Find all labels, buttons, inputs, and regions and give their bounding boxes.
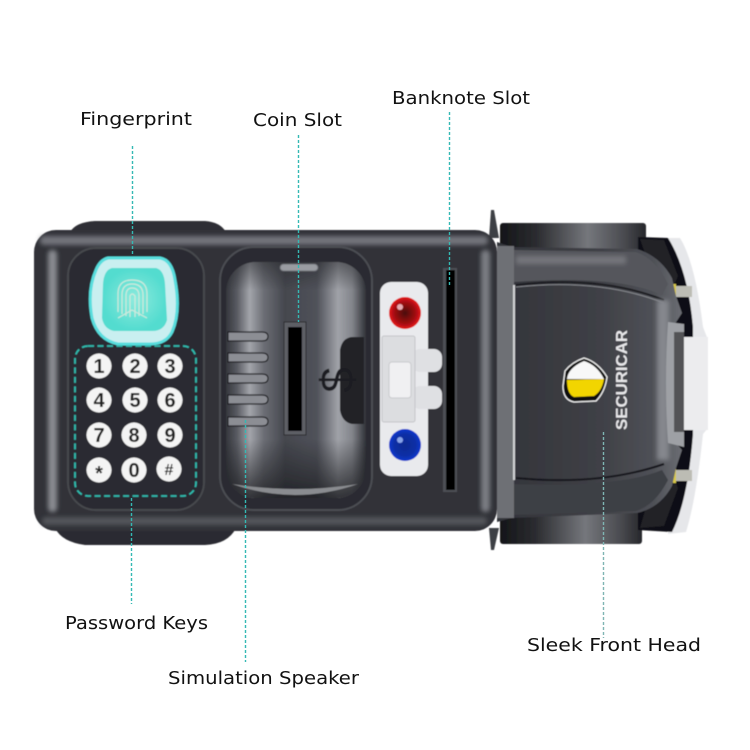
key numbers: 5 xyxy=(129,390,141,412)
grille xyxy=(666,322,684,447)
dollar emblem: $ xyxy=(311,367,363,393)
fingerprint icon xyxy=(118,280,147,318)
key numbers: * xyxy=(95,463,103,485)
key numbers: 0 xyxy=(128,460,140,482)
key numbers: 7 xyxy=(93,425,105,447)
key numbers: 1 xyxy=(93,356,105,378)
label: Coin Slot: Coin Slot xyxy=(253,110,342,131)
front wheels xyxy=(500,223,646,544)
toy car xyxy=(34,210,708,550)
rear wheels xyxy=(55,221,236,545)
mirrors xyxy=(489,210,499,550)
key discs xyxy=(86,354,182,482)
speaker dome xyxy=(220,247,372,510)
banknote slot xyxy=(443,268,457,492)
key numbers: 3 xyxy=(164,356,176,378)
shield logo xyxy=(563,358,607,402)
label: Banknote Slot: Banknote Slot xyxy=(392,88,530,109)
brand name: SECURICAR xyxy=(614,330,631,430)
label: Fingerprint: Fingerprint xyxy=(80,109,192,130)
leader lines xyxy=(132,112,604,662)
password keypad xyxy=(75,346,196,496)
key numbers: # xyxy=(165,462,174,479)
key numbers: 9 xyxy=(164,425,176,447)
key numbers: 6 xyxy=(164,390,176,412)
label: Simulation Speaker: Simulation Speaker xyxy=(168,668,360,689)
dashed keypad outline xyxy=(75,346,196,496)
label: Sleek Front Head: Sleek Front Head xyxy=(527,635,701,656)
key numbers: 2 xyxy=(129,356,141,378)
cab hood xyxy=(497,242,684,522)
blue light xyxy=(389,429,421,461)
white light panel xyxy=(380,282,428,476)
fingerprint sensor xyxy=(90,258,177,344)
main body xyxy=(34,230,497,531)
red light xyxy=(389,297,421,329)
key numbers: 4 xyxy=(93,390,105,412)
coin slot xyxy=(284,322,306,435)
key numbers xyxy=(93,356,176,485)
label: Password Keys: Password Keys xyxy=(65,613,208,634)
switch xyxy=(382,336,442,422)
lock panel recess xyxy=(68,248,204,510)
key numbers: 8 xyxy=(128,425,140,447)
speaker grill xyxy=(228,332,268,426)
front bumper xyxy=(638,237,708,534)
